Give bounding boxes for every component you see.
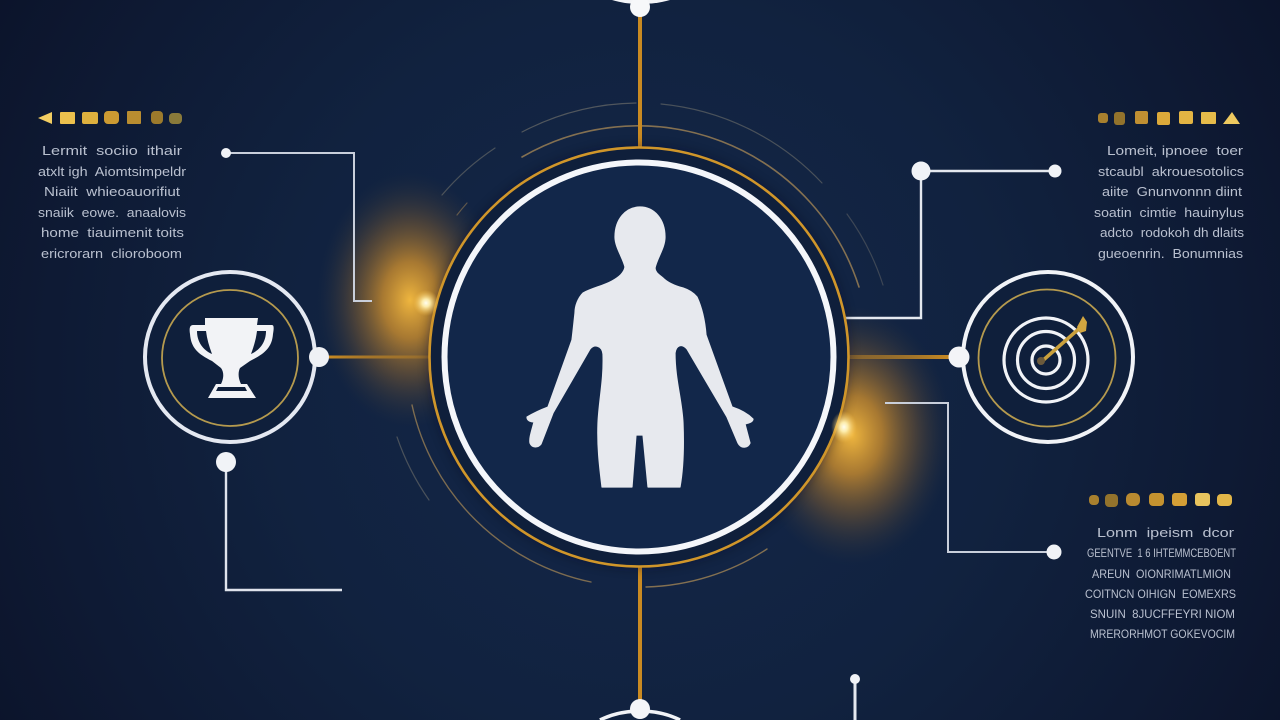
outer ring [963, 272, 1133, 442]
glow core: lower right [831, 411, 857, 443]
body text: stcaubl akrouesotolics [1098, 164, 1245, 179]
gold horizontal connectors [328, 355, 952, 359]
panel: upper right text [1094, 111, 1245, 261]
body text: atxlt igh Aiomtsimpeldr [38, 164, 187, 179]
icon: arrow [1037, 316, 1087, 365]
body text [1094, 143, 1245, 261]
glow: upper left [318, 172, 502, 428]
body text: SNUIN 8JUCFFEYRI NIOM [1090, 607, 1235, 621]
body text: MRERORHMOT GOKEVOCIM [1090, 627, 1235, 641]
body text: gueoenrin. Bonumnias [1098, 246, 1244, 261]
inner gold ring [978, 290, 1116, 426]
connector lines [226, 153, 1055, 720]
body text: GEENTVE 1 6 IHTEMMCEBOENT [1087, 546, 1237, 560]
body text [38, 143, 187, 261]
outer ring [145, 272, 315, 442]
icon: trophy [190, 318, 274, 398]
body text: adcto rodokoh dh dlaits [1100, 225, 1245, 240]
body text: snaiik eowe. anaalovis [38, 205, 187, 220]
panel: upper left text [38, 111, 187, 261]
inner gold ring [162, 290, 298, 426]
top node [612, 0, 670, 17]
body text: AREUN OIONRIMATLMION [1092, 567, 1231, 581]
badge: trophy [145, 272, 329, 442]
gold vertical connectors [638, 14, 642, 706]
heading [38, 111, 182, 124]
bottom node [600, 699, 680, 720]
body text [1085, 525, 1237, 641]
connector dot [948, 346, 970, 368]
gold ring [430, 148, 848, 566]
connector dots [216, 148, 1062, 684]
body text: Lonm ipeism dcor [1097, 525, 1235, 540]
heading [1098, 111, 1240, 125]
glow: lower right [752, 305, 952, 565]
white ring [444, 162, 834, 552]
body text: COITNCN OIHIGN EOMEXRS [1085, 587, 1236, 601]
body text: Niaiit whieoauorifiut [44, 184, 180, 199]
body text: aiite Gnunvonnn diint [1102, 184, 1242, 199]
central disc shadow [432, 150, 846, 564]
heading [1089, 493, 1232, 507]
concentric arcs [397, 103, 883, 587]
body text: home tiauimenit toits [41, 225, 185, 240]
body text: Lomeit, ipnoee toer [1107, 143, 1244, 158]
central emblem [430, 148, 848, 566]
body text: Lermit sociio ithair [42, 143, 183, 158]
connector dot [309, 347, 329, 367]
icon: target rings [1004, 318, 1088, 402]
glow core: upper left [413, 290, 439, 316]
panel: lower right text [1085, 493, 1237, 641]
icon: human silhouette [527, 207, 753, 487]
badge: target [948, 272, 1133, 442]
body text: soatin cimtie hauinylus [1094, 205, 1245, 220]
body text: ericrorarn clioroboom [41, 246, 182, 261]
